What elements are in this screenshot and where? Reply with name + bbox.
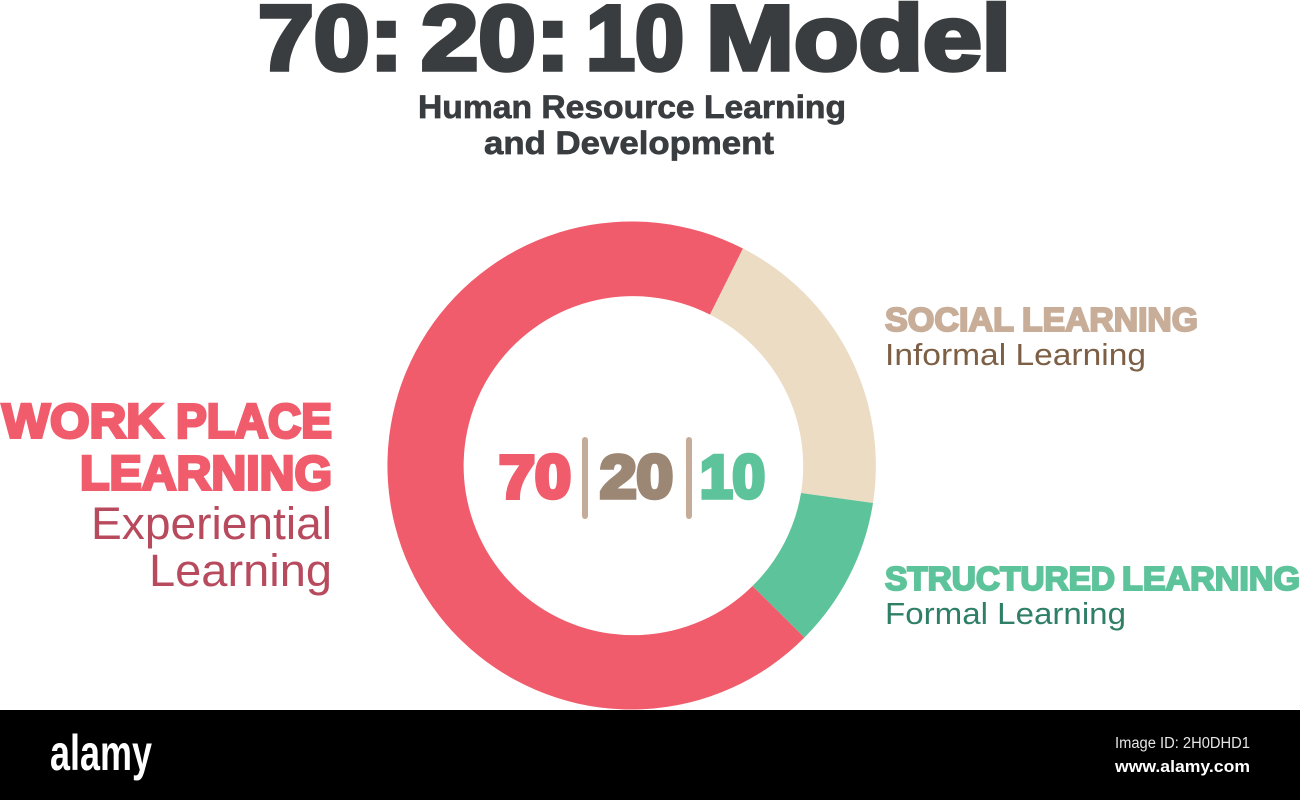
label: structured learning: STRUCTURED <box>885 560 1115 597</box>
footer bar <box>0 710 1300 800</box>
label: social learning <box>885 301 1198 372</box>
segment: 20 percent social learning <box>710 248 876 503</box>
label: social learning: SOCIAL <box>885 301 1014 338</box>
title <box>258 0 1011 90</box>
subtitle <box>418 89 846 161</box>
subtitle: and Development <box>484 125 774 161</box>
divider right <box>686 437 692 519</box>
segment: 10 percent structured learning <box>752 493 873 638</box>
label: work place learning: Learning <box>149 545 332 596</box>
label: work place learning: PLACE <box>176 396 332 448</box>
divider left <box>582 437 588 519</box>
label: structured learning: LEARNING <box>1122 560 1300 597</box>
website: www.alamy.com <box>1114 758 1250 776</box>
subtitle: Human Resource Learning <box>418 89 846 125</box>
figure 10: 10 <box>700 444 765 510</box>
label: structured learning: Formal Learning <box>885 596 1126 631</box>
label: work place learning: WORK <box>2 396 163 448</box>
label: work place learning: LEARNING <box>80 448 332 500</box>
center figures <box>499 437 765 519</box>
figure 70: 70 <box>499 444 571 510</box>
image id: Image ID: 2H0DHD1 <box>1115 735 1250 752</box>
label: structured learning <box>885 560 1300 631</box>
segment: 70 percent work place learning <box>387 221 804 709</box>
alamy logo: alamy <box>50 725 152 781</box>
figure 20: 20 <box>600 444 673 510</box>
label: social learning: Informal Learning <box>885 337 1146 372</box>
label: work place learning <box>2 396 332 596</box>
label: work place learning: Experiential <box>91 498 332 549</box>
label: social learning: LEARNING <box>1022 301 1198 338</box>
donut chart <box>387 221 876 709</box>
